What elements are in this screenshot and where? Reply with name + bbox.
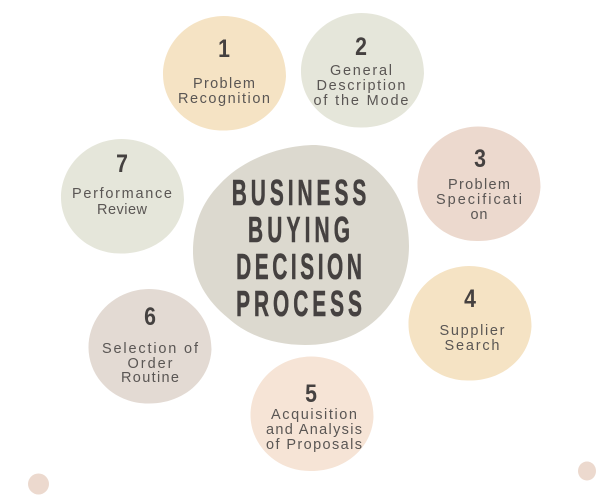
title xyxy=(232,173,366,325)
panel: step 7 xyxy=(61,139,184,254)
panel: center title blob xyxy=(193,145,409,345)
title: BUSINESS xyxy=(232,173,366,214)
decorative dot: bottom right xyxy=(578,462,596,480)
panel: step 3: on xyxy=(470,207,488,223)
panel: step 2: General xyxy=(330,63,392,79)
panel: step 3: 3 xyxy=(474,144,486,172)
decorative dot: bottom left xyxy=(28,474,49,494)
panel: step 3 xyxy=(418,126,540,241)
panel: step 2: Description xyxy=(316,78,406,94)
panel: step 5: 5 xyxy=(305,379,317,407)
panel: step 6: Selection of xyxy=(102,341,199,357)
panel: step 7: Review xyxy=(97,202,148,218)
panel: step 4: Supplier xyxy=(440,323,505,339)
panel: step 4: 4 xyxy=(464,284,476,312)
panel: step 1: 1 xyxy=(218,34,230,62)
panel: step 5: Acquisition xyxy=(271,407,357,423)
panel: step 7: 7 xyxy=(116,149,128,177)
panel: step 7: Performance xyxy=(72,186,172,202)
panel: step 3: Problem xyxy=(448,177,510,193)
panel: step 5: of Proposals xyxy=(266,437,362,453)
panel: step 2 xyxy=(301,13,424,128)
panel: step 6: Routine xyxy=(121,370,179,386)
panel: step 1: Problem xyxy=(193,76,255,92)
panel: step 6: Order xyxy=(128,356,173,372)
panel: step 6 xyxy=(88,289,212,404)
title: DECISION xyxy=(236,247,362,288)
title: PROCESS xyxy=(236,284,362,325)
panel: step 3: Specificati xyxy=(436,192,522,208)
panel: step 2: 2 xyxy=(355,32,367,60)
panel: step 4: Search xyxy=(444,338,500,354)
panel: step 4 xyxy=(408,266,532,381)
title: BUYING xyxy=(248,210,350,251)
panel: step 5: and Analysis xyxy=(266,422,362,438)
panel: step 6: 6 xyxy=(144,302,156,330)
panel: step 5 xyxy=(250,356,374,471)
panel: step 1: Recognition xyxy=(178,91,270,107)
panel: step 2: of the Mode xyxy=(314,93,408,109)
panel: step 1 xyxy=(163,16,286,131)
